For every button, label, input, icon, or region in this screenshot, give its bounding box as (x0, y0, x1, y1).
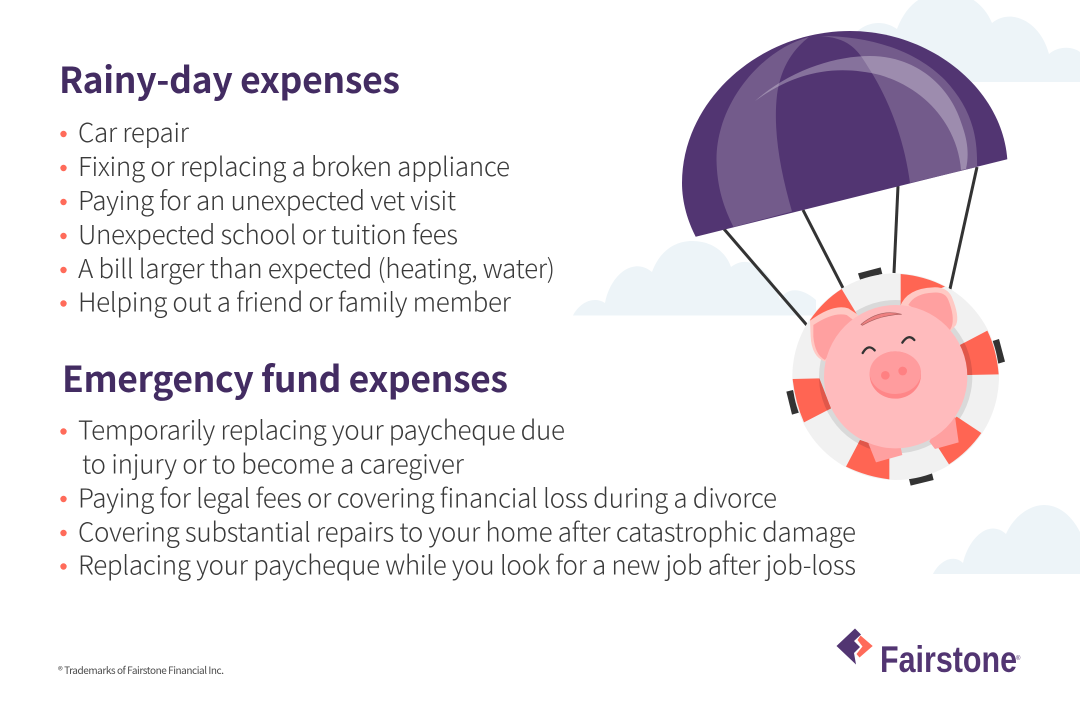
list: emergency fund expenses: Paying for legal fees or covering financial loss during a divorce (78, 478, 777, 516)
logo mark (836, 628, 861, 664)
parachute canopy (682, 31, 1007, 237)
list: emergency fund expenses: Covering substantial repairs to your home after catastrophic damage (78, 512, 856, 550)
canopy sweep highlight (755, 56, 968, 170)
logo: Fairstone (836, 628, 1021, 680)
list: emergency fund expenses: Temporarily replacing your paycheque due (78, 410, 565, 448)
pig snout (870, 351, 921, 399)
list: rainy-day expenses: Paying for an unexpected vet visit (78, 181, 456, 218)
cloud: middle (573, 241, 816, 316)
cloud: bottom right (933, 505, 1080, 574)
list: rainy-day expenses: Helping out a friend or family member (78, 282, 512, 320)
pig left ear (810, 307, 858, 362)
heading: rainy-day expenses: Rainy-day expenses (59, 53, 400, 104)
ring red segments (793, 274, 999, 479)
pig right ear (900, 287, 957, 332)
list: rainy-day expenses: A bill larger than expected (heating, water) (78, 249, 555, 286)
list: rainy-day expenses (60, 113, 555, 320)
pig body (824, 305, 967, 448)
canopy left highlight panel (716, 37, 809, 227)
pig feet (868, 417, 959, 462)
heading: emergency fund expenses: Emergency fund expenses (62, 352, 508, 403)
cloud: top right (850, 0, 1080, 82)
list: rainy-day expenses: Unexpected school or tuition fees (78, 215, 458, 252)
list: rainy-day expenses: Fixing or replacing a broken appliance (78, 147, 510, 184)
footnote: ® Trademarks of Fairstone Financial Inc. (58, 662, 224, 677)
parachute ropes (724, 167, 977, 325)
piggy bank in life ring (786, 267, 1005, 486)
ring segment shadows (819, 342, 972, 449)
pig eyes (863, 337, 914, 353)
logo: Fairstone: ® (1016, 655, 1021, 662)
list: rainy-day expenses: Car repair (78, 113, 190, 150)
ring handles (786, 267, 1005, 486)
coin slot (861, 313, 902, 325)
list: emergency fund expenses: Replacing your paycheque while you look for a new job after job-loss (78, 546, 856, 582)
life ring (792, 273, 999, 480)
list: emergency fund expenses (60, 410, 856, 582)
canopy right highlight panel (820, 36, 977, 183)
logo wordmark: Fairstone (880, 639, 1017, 680)
list: emergency fund expenses: to injury or to become a caregiver (82, 444, 465, 482)
